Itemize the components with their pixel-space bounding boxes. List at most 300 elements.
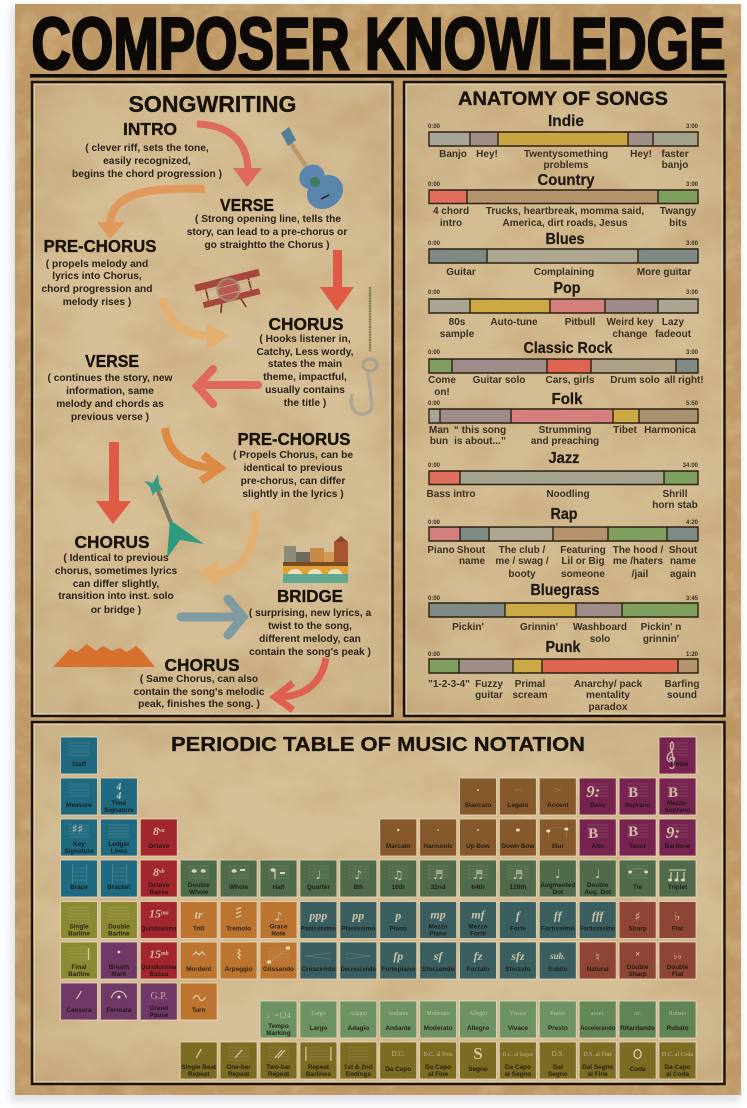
step: chorus 2: can differ slightly, <box>73 579 159 590</box>
cell: turn <box>180 983 217 1020</box>
cell: double sharp: Double <box>627 964 649 971</box>
cell: 32nd: 32nd <box>431 884 446 891</box>
cell: decrescendo: Decrescendo <box>341 966 376 973</box>
step: chorus 1: Catchy, Less wordy, <box>256 347 354 358</box>
panel: periodic table <box>32 722 724 1084</box>
song: folk: “ this song <box>454 425 506 436</box>
step: final chorus: ( Same Chorus, can also <box>140 674 258 685</box>
cell: quindicesima bassa: mb <box>161 951 169 957</box>
cell: grace note: Note <box>271 930 286 938</box>
cell: da capo al segno: Da Capo <box>505 1064 531 1071</box>
cell: grace note <box>260 902 297 938</box>
song: folk <box>428 391 699 447</box>
cell: baritone: Baritone <box>665 843 691 850</box>
song: pop: change <box>612 329 648 340</box>
heading: periodic table: PERIODIC TABLE OF MUSIC NOTATION <box>171 734 585 756</box>
cell: segno: S <box>473 1044 483 1063</box>
cell: mezzo forte: Forte <box>470 930 486 938</box>
song: punk: 1:20 <box>686 652 699 658</box>
cell: sharp: ♯ <box>635 910 641 924</box>
cell: moderato: Moderato <box>426 1011 450 1017</box>
arrow: chorus to verse <box>197 369 258 404</box>
cell: piano <box>380 902 417 938</box>
cell: octave <box>140 819 177 856</box>
cell: rubato: Rubato <box>669 1011 686 1017</box>
cell: crescendo <box>300 942 337 979</box>
cell: forzato <box>460 942 496 979</box>
song: rap: /jail <box>632 569 649 580</box>
cell: sforzando: Sforzando <box>422 966 455 973</box>
cell: half: Half <box>272 884 285 891</box>
cell: double barline <box>100 902 137 938</box>
cell: tie <box>619 860 656 897</box>
cell: forte: f <box>516 908 521 922</box>
cell: soprano: Soprano <box>625 802 651 809</box>
step: intro: easily recognized, <box>103 156 191 167</box>
cell: single beat repeat <box>180 1042 217 1079</box>
cell: marcato <box>380 819 417 856</box>
song: pop: sample <box>440 329 475 340</box>
cell: da capo al coda: Da Capo <box>665 1064 691 1071</box>
cell: octave: Octave <box>148 843 170 850</box>
cell: double whole: Whole <box>189 889 209 896</box>
song: pop: fadeout <box>655 329 692 340</box>
group: row 3 <box>60 819 696 856</box>
cell: mordent <box>180 942 217 979</box>
song: classic rock <box>428 340 704 398</box>
cell: 1st and 2nd endings: Endings <box>346 1071 371 1078</box>
song: folk: 5:50 <box>686 401 699 407</box>
step: final chorus <box>134 655 265 710</box>
step: chorus 1: usually contains <box>265 385 345 396</box>
cell: augmented dot: Augmented <box>540 882 575 889</box>
cell: fermata: Fermata <box>106 1007 132 1014</box>
song: rap: booty <box>508 569 536 580</box>
cell: adagio: Adagio <box>349 1011 367 1017</box>
cell: forzato: Forzato <box>466 966 490 973</box>
cell: trill: tr <box>195 908 203 922</box>
cell: 128th: 128th <box>510 884 526 891</box>
cell: up bow: Up Bow <box>466 843 490 850</box>
cell: decrescendo <box>340 942 377 979</box>
song: punk: scream <box>512 690 548 701</box>
step: pre-chorus 1: lyrics into Chorus, <box>52 271 142 282</box>
cell: staccato <box>460 778 496 815</box>
cell: allegro <box>460 1001 496 1038</box>
arrow: pre-chorus to bridge <box>198 511 255 586</box>
cell: flat: Flat <box>672 926 684 932</box>
cell: octave bassa: Bassa <box>149 889 169 896</box>
cell: dal segno al fine <box>579 1042 616 1079</box>
cell: quindicesima: ma <box>161 910 169 916</box>
cell: accent: Accent <box>547 802 569 809</box>
group: row 5 <box>60 902 696 938</box>
cell: subito <box>539 942 576 979</box>
song: punk: sound <box>667 690 697 701</box>
heading: anatomy of songs: ANATOMY OF SONGS <box>458 88 668 110</box>
cell: accelerando: Accelerando <box>580 1025 615 1032</box>
cell: fermata <box>100 983 137 1020</box>
cell: double aug dot: ♩ <box>595 867 601 881</box>
song: rap: Lil or Big <box>561 556 605 567</box>
song: indie: Banjo <box>439 149 467 160</box>
song: jazz: Shrill <box>662 489 688 500</box>
cell: repeat barlines: Repeat <box>308 1064 330 1071</box>
cell: whole <box>220 860 257 897</box>
cell: vivace: Vivace <box>508 1025 528 1032</box>
cell: andante: Andante <box>388 1011 409 1017</box>
arrow: chorus to bridge <box>181 599 243 635</box>
group: repeat row <box>180 1042 696 1079</box>
step: pre-chorus 1: PRE-CHORUS <box>44 236 156 256</box>
song: classic rock: Drum solo <box>610 375 660 386</box>
cell: caesura <box>60 983 98 1020</box>
cell: da capo al segno: al Segno <box>505 1071 531 1078</box>
cell: sforzando: sf <box>433 949 443 963</box>
cell: dal segno <box>539 1042 576 1079</box>
cell: vivace: Vivace <box>510 1011 527 1017</box>
cell: bass: Bass <box>590 802 606 809</box>
cell: baritone <box>659 819 696 856</box>
cell: mezzo forte <box>460 902 496 938</box>
cell: time signature: Time <box>111 800 127 807</box>
cell: quarter: Quarter <box>307 884 330 891</box>
cell: mezzo-soprano: Mezzo- <box>667 800 688 807</box>
cell: trill: Trill <box>193 926 205 932</box>
song: rap: someone <box>561 569 605 580</box>
song: indie: 3:00 <box>686 124 699 130</box>
cell: ritardando: rit. <box>634 1011 642 1017</box>
cell: brace: Brace <box>70 884 88 891</box>
cell: double sharp: Sharp <box>629 971 647 978</box>
song: indie: Indie <box>548 113 584 130</box>
cell: 32nd: ♬ <box>433 868 443 882</box>
cell: dal segno: Segno <box>548 1071 568 1078</box>
cell: sharp <box>619 902 656 938</box>
cell: natural: Natural <box>587 966 609 973</box>
cell: grace note: Grace <box>269 924 288 930</box>
cell: 64th <box>460 860 496 897</box>
cell: quindicesima bassa: Bassa <box>149 971 169 978</box>
cell: pianissimo: pp <box>351 908 364 922</box>
cell: da capo al fine: D.C. al Fine <box>423 1052 453 1058</box>
cell: 16th: 16th <box>392 884 405 891</box>
cell: staff: Staff <box>72 761 87 768</box>
step: chorus 2: CHORUS <box>74 532 150 552</box>
cell: rubato <box>659 1001 696 1038</box>
song: indie: Twentysomething <box>524 149 608 160</box>
cell: ledger lines: Ledger <box>108 841 130 848</box>
song: country <box>428 172 699 229</box>
cell: natural <box>579 942 616 979</box>
step: intro: ( clever riff, sets the tone, <box>85 143 209 154</box>
step: intro: begins the chord progression ) <box>72 169 222 180</box>
cell: double flat: ♭♭ <box>673 952 682 962</box>
cell: key signature <box>60 819 98 856</box>
cell: fortepiano: Fortepiano <box>381 966 415 973</box>
cell: da capo al fine: al Fine <box>428 1071 449 1078</box>
cell: subito: sub. <box>549 951 565 961</box>
cell: mezzo piano <box>420 902 457 938</box>
cell: piano: Piano <box>389 926 407 932</box>
cell: da capo al fine: Da Capo <box>425 1064 451 1071</box>
cell: da capo al fine <box>420 1042 457 1079</box>
cell: double barline: Barline <box>108 930 130 938</box>
cell: pianississimo <box>300 902 337 938</box>
song: country: 0:00 <box>428 182 441 188</box>
cell: presto: Presto <box>550 1011 565 1017</box>
song: rap: again <box>670 569 696 580</box>
song: rap: name <box>459 556 485 567</box>
song: classic rock: Guitar solo <box>473 375 525 386</box>
cell: pianississimo: Pianississimo <box>301 926 336 932</box>
song: pop: Lazy <box>662 317 685 328</box>
cell: 64th: 64th <box>471 884 485 891</box>
cell: slur <box>539 819 576 856</box>
cell: octave bassa <box>140 860 177 897</box>
cell: moderato: Moderato <box>424 1025 453 1032</box>
cell: tenor: Tenor <box>629 843 647 850</box>
cell: final barline <box>60 942 98 979</box>
arrow: verse to chorus 2 <box>96 442 131 524</box>
cell: grand pause: Grand <box>149 1005 168 1012</box>
cell: mezzo-soprano <box>659 778 696 815</box>
cell: legato: Legato <box>507 802 528 809</box>
cell: allegro: Allegro <box>467 1025 489 1032</box>
cell: largo <box>300 1001 337 1038</box>
song: rap: Shout <box>457 545 486 556</box>
cell: down bow: Down Bow <box>501 843 534 850</box>
cell: staccato: Staccato <box>465 802 491 809</box>
group: row 4 <box>60 860 696 897</box>
cell: slur: Slur <box>552 843 565 850</box>
cell: subito: Subito <box>548 966 568 973</box>
cell: measure: Measure <box>66 802 92 809</box>
cell: fortississimo: Fortississimo <box>580 926 615 932</box>
song: punk: guitar <box>475 690 503 701</box>
cell: mezzo piano: mp <box>430 908 446 922</box>
step: chorus 1: theme, impactful, <box>263 372 347 383</box>
cell: one-bar repeat <box>220 1042 257 1079</box>
step: verse 2: melody and chords as <box>56 399 164 410</box>
icon: flying v guitar <box>144 474 204 558</box>
song: folk: and preaching <box>531 436 599 447</box>
cell: presto: Presto <box>548 1025 568 1032</box>
cell: quarter <box>300 860 337 897</box>
cell: breath mark <box>100 942 137 979</box>
song: bluegrass: Pickin' n <box>641 622 681 633</box>
song: rap: me / swag / <box>495 556 549 567</box>
cell: forte: Forte <box>510 926 526 932</box>
cell: adagio <box>340 1001 377 1038</box>
song: jazz: 0:00 <box>428 463 441 469</box>
cell: tempo marking: ♩=124 <box>266 1011 291 1020</box>
icon: fishing hook <box>351 287 377 414</box>
cell: measure <box>60 778 98 815</box>
step: pre-chorus 1: melody rises ) <box>63 297 131 308</box>
cell: andante <box>380 1001 417 1038</box>
song: indie: Hey! <box>476 149 498 160</box>
cell: tremolo: Tremolo <box>226 926 251 932</box>
cell: 8th: ♪ <box>354 868 362 882</box>
cell: fortississimo: fff <box>592 908 604 922</box>
cell: allegro: Allegro <box>469 1011 487 1017</box>
cell: adagio: Adagio <box>347 1025 369 1032</box>
cell: two-bar repeat <box>260 1042 297 1079</box>
cell: tenor <box>619 819 656 856</box>
song: classic rock: 0:00 <box>428 350 441 356</box>
step: chorus 2 <box>55 532 177 616</box>
cell: staff <box>60 737 98 774</box>
group: tempo row <box>260 1001 696 1038</box>
song: rap: 0:00 <box>428 520 441 526</box>
cell: tenor: B <box>628 824 638 840</box>
song: blues: 3:00 <box>686 241 699 247</box>
group: row 7 <box>60 983 217 1020</box>
cell: 8th <box>340 860 377 897</box>
cell: accelerando <box>579 1001 616 1038</box>
song: jazz: 34:00 <box>683 463 699 469</box>
group: row 6 <box>60 942 696 979</box>
cell: time signature: Signature <box>104 807 134 814</box>
cell: legato <box>499 778 536 815</box>
step: bridge: contain the song's peak ) <box>249 647 371 658</box>
cell: coda <box>619 1042 656 1079</box>
cell: pianissimo <box>340 902 377 938</box>
song: blues: Blues <box>546 231 585 248</box>
step: pre-chorus 2: pre-chorus, can differ <box>241 476 345 487</box>
song: classic rock: 3:00 <box>686 350 699 356</box>
cell: final barline: Barline <box>68 971 90 978</box>
cell: double barline: Double <box>108 924 130 930</box>
cell: breath mark: Mark <box>111 971 127 978</box>
cell: quarter: ♩ <box>316 868 321 882</box>
icon: biplane <box>194 269 267 318</box>
panel: songwriting <box>32 82 392 716</box>
heading: songwriting: SONGWRITING <box>128 91 296 117</box>
cell: fortepiano: fp <box>393 949 403 963</box>
cell: quindicesima: Quindicesima <box>141 926 177 932</box>
song: country: Trucks, heartbreak, momma said, <box>486 206 644 217</box>
cell: trill <box>180 902 217 938</box>
cell: repeat barlines <box>300 1042 337 1079</box>
song: country: Country <box>538 172 595 189</box>
arrow: intro to pre-chorus <box>97 189 205 239</box>
cell: mordent: Mordent <box>186 966 212 973</box>
cell: two-bar repeat: Repeat <box>268 1071 290 1078</box>
cell: sforzato <box>499 942 536 979</box>
cell: da capo al coda: al Coda <box>666 1071 689 1078</box>
cell: alto: Alto <box>591 843 604 850</box>
cell: double sharp <box>619 942 656 979</box>
cell: brace <box>60 860 98 897</box>
step: final chorus: contain the song's melodic <box>134 687 265 698</box>
song: bluegrass: 3:45 <box>686 596 699 602</box>
cell: mezzo-soprano: Soprano <box>665 807 691 814</box>
cell: 16th: ♫ <box>393 868 404 882</box>
cell: repeat barlines: Barlines <box>306 1071 331 1078</box>
song: rap: Shout <box>669 545 698 556</box>
song: pop: Pop <box>554 280 581 297</box>
cell: double aug dot <box>579 860 616 897</box>
step: chorus 2: transition into inst. solo <box>58 591 174 602</box>
song: punk: "1-2-3-4" <box>428 679 470 690</box>
song: country: Twangy <box>660 206 697 217</box>
song: indie: banjo <box>662 160 688 171</box>
song: bluegrass: Pickin' <box>452 622 484 633</box>
arrow: verse to chorus <box>320 250 354 311</box>
arrow: pre-chorus to chorus <box>163 298 229 351</box>
cell: tempo marking: Tempo <box>268 1023 289 1030</box>
cell: time signature: 4 <box>115 791 121 802</box>
step: verse 2 <box>48 351 173 423</box>
cell: single barline <box>60 902 98 938</box>
song: blues: Guitar <box>446 267 476 278</box>
step: chorus 1: ( Hooks listener in, <box>259 334 351 345</box>
step: pre-chorus 1 <box>42 236 156 308</box>
cell: da capo: Da Capo <box>385 1066 411 1073</box>
cell: presto <box>539 1001 576 1038</box>
cell: largo: Largo <box>311 1011 326 1017</box>
step: verse 2: information, same <box>66 386 154 397</box>
cell: key signature: Signature <box>64 848 94 855</box>
step: pre-chorus 2 <box>233 429 353 500</box>
cell: mezzo-soprano: B <box>668 785 678 801</box>
song: pop: Pitbull <box>565 317 595 328</box>
song: rap: The hood / <box>613 545 663 556</box>
step: chorus 1: CHORUS <box>268 314 344 334</box>
step: bridge: ( surprising, new lyrics, a <box>249 608 371 619</box>
cell: pianissimo: Pianissimo <box>341 926 375 932</box>
cell: triplet <box>659 860 696 897</box>
cell: bracket: Bracket <box>107 884 131 891</box>
cell: octave: 8 <box>153 824 159 838</box>
cell: up bow <box>460 819 496 856</box>
song: indie: Hey! <box>630 149 652 160</box>
cell: sforzato: sfz <box>510 949 525 963</box>
song: rap: Featuring <box>560 545 606 556</box>
song: bluegrass: Grinnin' <box>520 622 558 633</box>
cell: dal segno al fine: al Fine <box>588 1071 608 1078</box>
song: punk: Primal <box>515 679 546 690</box>
cell: fortississimo <box>579 902 616 938</box>
step: pre-chorus 2: identical to previous <box>243 463 343 474</box>
cell: time signature <box>100 778 137 815</box>
arrow: intro to verse <box>197 124 262 187</box>
cell: single beat repeat: Single Beat <box>181 1064 217 1071</box>
step: verse 1 <box>187 195 347 251</box>
step: pre-chorus 1: ( propels melody and <box>46 259 148 270</box>
cell: time signature: 4 <box>115 782 121 793</box>
cell: mezzo forte: mf <box>471 908 486 922</box>
cell: one-bar repeat: Repeat <box>228 1071 250 1078</box>
cell: down bow <box>499 819 536 856</box>
cell: fortissimo: Fortissimo <box>541 926 575 932</box>
cell: vivace <box>499 1001 536 1038</box>
step: intro: INTRO <box>123 119 177 139</box>
cell: whole: Whole <box>229 884 249 891</box>
cell: dal segno: D.S. <box>552 1050 564 1058</box>
cell: mezzo piano: Piano <box>429 930 447 938</box>
cell: grand pause <box>140 983 177 1020</box>
cell: baritone: 9: <box>666 823 680 842</box>
song: classic rock: Come <box>428 375 456 386</box>
cell: key signature: ♯♯ <box>72 822 83 836</box>
cell: harmonic: Harmonic <box>423 843 453 850</box>
step: bridge: different melody, can <box>259 634 361 645</box>
cell: tempo marking: Marking <box>266 1030 291 1037</box>
title rule <box>30 74 727 78</box>
